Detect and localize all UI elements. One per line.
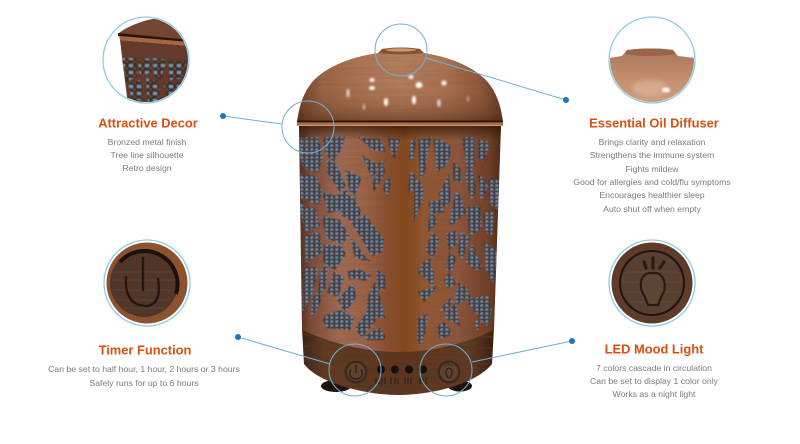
text: attractive decor: Retro design (122, 163, 172, 173)
indicator lights (376, 366, 427, 384)
text: essential oil diffuser: Strengthens the immune system (590, 150, 714, 160)
LED button on base (438, 360, 460, 384)
top mist outlet (378, 47, 424, 54)
thumbnail: essential oil diffuser (609, 17, 695, 105)
text: essential oil diffuser: Brings clarity and relaxation (599, 137, 706, 147)
power icon (126, 258, 159, 306)
text: timer function: Safely runs for up to 6 hours (89, 378, 199, 388)
text: attractive decor: Attractive Decor (98, 116, 198, 130)
text: LED mood light: LED Mood Light (605, 342, 704, 356)
wooden base (302, 330, 494, 395)
text: essential oil diffuser: Essential Oil Diffuser (589, 116, 719, 130)
feet (321, 380, 472, 392)
text: LED mood light: Can be set to display 1 color only (590, 376, 719, 386)
text: essential oil diffuser: Encourages healthier sleep (599, 190, 705, 200)
text: attractive decor (98, 116, 198, 173)
text: essential oil diffuser: Auto shut off when empty (603, 204, 702, 214)
tree silhouette cut-outs (300, 137, 499, 346)
text: LED mood light (590, 342, 719, 399)
text: timer function (48, 342, 241, 388)
bulb icon (641, 273, 665, 305)
lid rim (297, 120, 503, 126)
text: LED mood light: 7 colors cascade in circulation (596, 363, 712, 373)
text: LED mood light: Works as a night light (613, 389, 696, 399)
timer button on base (344, 360, 368, 384)
copper body with tree cut-outs (297, 126, 503, 361)
text: essential oil diffuser: Fights mildew (625, 164, 679, 174)
text: essential oil diffuser (573, 116, 731, 214)
text: timer function: Timer Function (99, 342, 192, 358)
callout lines and markers (220, 24, 575, 396)
text: attractive decor: Tree line silhouette (110, 150, 184, 160)
thumbnail: attractive decor (103, 17, 190, 105)
thumbnail: LED button (609, 240, 695, 326)
text: essential oil diffuser: Good for allergies and cold/flu symptoms (573, 177, 731, 187)
copper dome lid (295, 45, 505, 123)
text: timer function: Can be set to half hour, 1 hour, 2 hours or 3 hours (48, 364, 241, 374)
diffuser product (295, 45, 505, 400)
thumbnail: timer button (104, 240, 190, 326)
text: attractive decor: Bronzed metal finish (108, 137, 187, 147)
dome highlights (346, 75, 469, 110)
